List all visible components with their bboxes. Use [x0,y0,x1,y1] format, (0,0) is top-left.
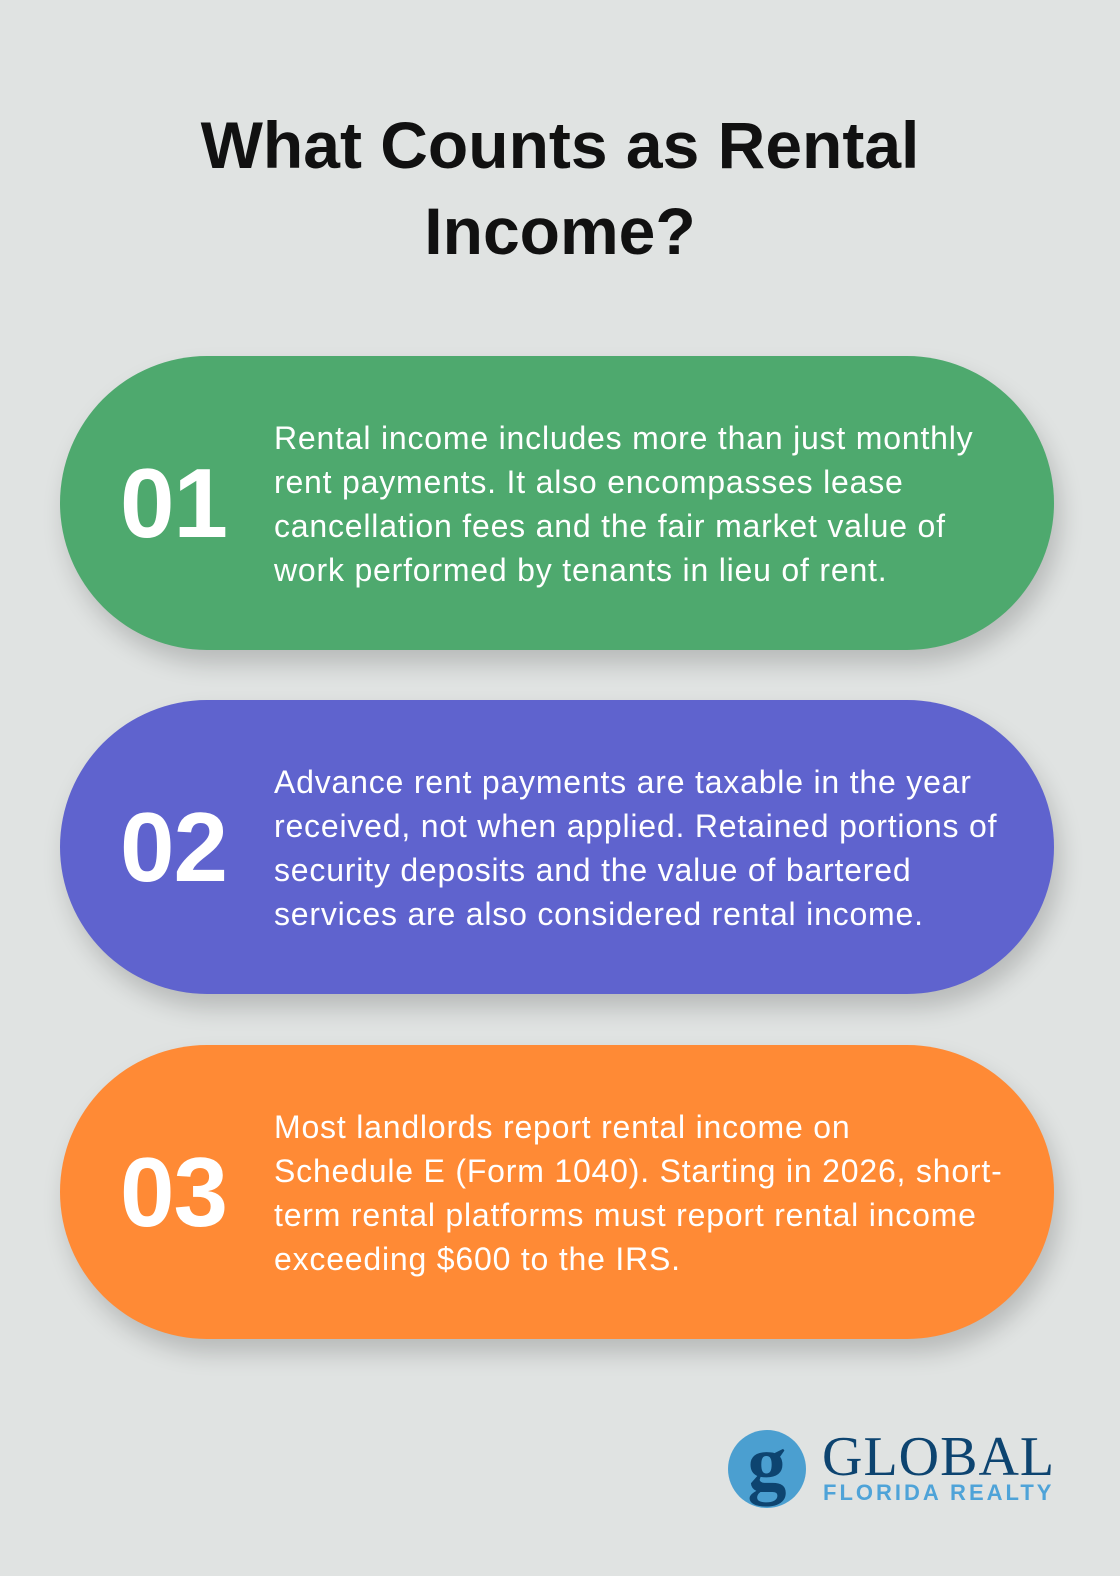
logo [728,1419,1055,1508]
logo text: GLOBAL [822,1426,1055,1488]
text 03: Most landlords report rental income on [274,1109,850,1145]
text 02 [274,764,997,932]
text 01: rent payments. It also encompasses lease [274,464,904,500]
title [200,108,919,268]
number 03: 03 [120,1137,227,1247]
text 03 [274,1109,1003,1277]
number 01: 01 [120,448,227,558]
number 02: 02 [120,792,227,902]
panel: 02 [60,700,1054,994]
text 02: security deposits and the value of bartered [274,852,911,888]
icon: g circle: g [748,1419,786,1506]
text 03: exceeding $600 to the IRS. [274,1241,681,1277]
text 02: services are also considered rental income. [274,896,924,932]
logo: FLORIDA REALTY [823,1480,1054,1505]
text 01: cancellation fees and the fair market value of [274,508,946,544]
panel: 01 [60,356,1054,650]
text 02: Advance rent payments are taxable in the year [274,764,972,800]
text 01 [274,420,973,588]
text 01: work performed by tenants in lieu of rent. [274,552,887,588]
title: What Counts as Rental [201,108,919,182]
panel: 03 [60,1045,1054,1339]
text 03: Schedule E (Form 1040). Starting in 2026, short- [274,1153,1003,1189]
text 01: Rental income includes more than just monthly [274,420,973,456]
title: Income? [424,194,696,268]
icon: g circle [728,1430,806,1508]
text 03: term rental platforms must report rental income [274,1197,977,1233]
text 02: received, not when applied. Retained portions of [274,808,997,844]
